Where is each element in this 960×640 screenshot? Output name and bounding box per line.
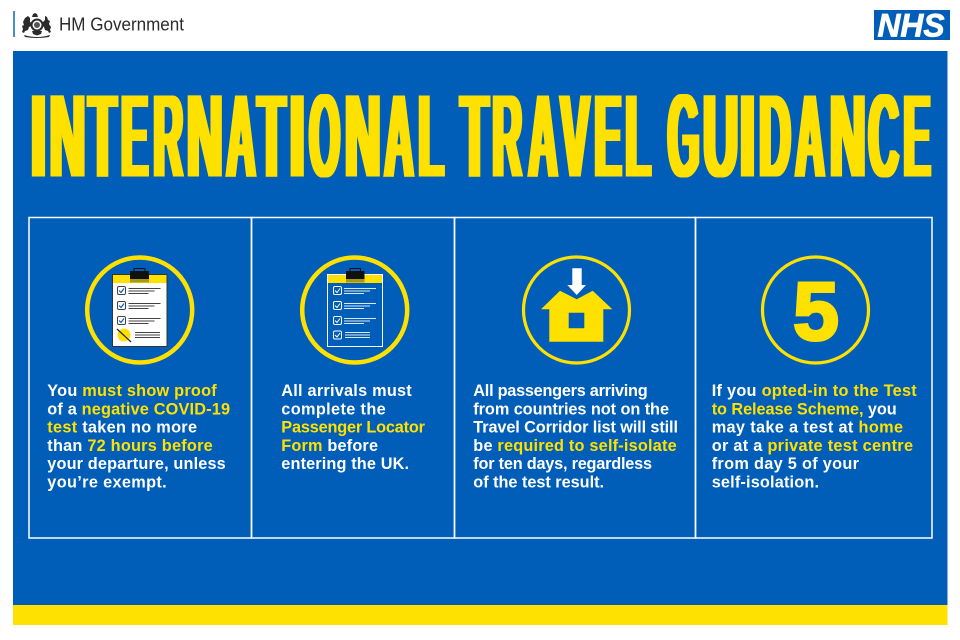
text: locator form: [281, 382, 426, 473]
icon: number five: 5: [793, 264, 839, 358]
title: N: [187, 69, 223, 204]
text: test to release scheme: [712, 382, 917, 492]
text: test to release scheme: from day 5 of your: [712, 455, 860, 473]
title: I: [30, 69, 46, 204]
icon: clipboard checklist: [302, 258, 407, 362]
title: L: [626, 69, 651, 204]
yellow footer band: [13, 605, 948, 625]
text: test to release scheme: self-isolation.: [712, 474, 819, 492]
title: U: [703, 69, 738, 204]
text: self-isolate: from countries not on the: [473, 400, 669, 418]
text: self-isolate: for ten days, regardless: [473, 455, 652, 473]
title: N: [50, 69, 85, 204]
logo wordmark: HM Government: [59, 14, 184, 34]
text: proof requirement: your departure, unless: [47, 455, 226, 473]
title: A: [528, 69, 558, 204]
text: proof requirement: [47, 382, 230, 492]
text: test to release scheme: to Release Scheme, you: [712, 400, 897, 418]
panel: proof of negative test: [29, 218, 252, 538]
text: self-isolate: of the test result.: [473, 474, 604, 492]
text: locator form: Passenger Locator: [281, 419, 426, 437]
title: E: [595, 69, 621, 204]
icon: clipboard checklist with struck-out item: [87, 258, 192, 362]
title: D: [759, 69, 791, 204]
panel: passenger locator form: [252, 218, 454, 538]
title: [30, 69, 930, 204]
icon: house with arrow: [524, 257, 630, 363]
title: V: [560, 69, 590, 204]
icon: royal crest: [22, 13, 51, 38]
panel: test to release: [696, 218, 932, 538]
text: self-isolate: be required to self-isolate: [473, 437, 677, 455]
text: locator form: All arrivals must: [281, 382, 412, 400]
text: test to release scheme: If you opted-in to the Test: [712, 382, 917, 400]
title: N: [830, 69, 866, 204]
title: O: [309, 69, 340, 204]
text: locator form: entering the UK.: [281, 455, 409, 473]
text: locator form: complete the: [281, 400, 386, 418]
title: R: [492, 69, 522, 204]
NHS logo: NHS: [878, 8, 945, 44]
text: self-isolate: [473, 382, 678, 492]
title: E: [121, 69, 148, 204]
icon: number five: [762, 257, 868, 363]
title: T: [258, 69, 286, 204]
HM Government logo: [13, 11, 184, 38]
text: proof requirement: of a negative COVID-19: [47, 400, 230, 418]
text: test to release scheme: may take a test at home: [712, 419, 903, 437]
text: self-isolate: Travel Corridor list will still: [473, 419, 678, 437]
text: test to release scheme: or at a private test centre: [712, 437, 913, 455]
title: L: [418, 69, 444, 204]
panel: self-isolation: [454, 218, 696, 538]
text: proof requirement: You must show proof: [47, 382, 217, 400]
title: I: [289, 69, 305, 204]
text: proof requirement: you’re exempt.: [47, 474, 167, 492]
title: A: [796, 69, 824, 204]
title: T: [460, 69, 488, 204]
title: R: [154, 69, 183, 204]
title: A: [226, 69, 256, 204]
text: proof requirement: than 72 hours before: [47, 437, 213, 455]
title: A: [384, 69, 414, 204]
title: T: [88, 69, 116, 204]
title: C: [868, 69, 899, 204]
title: G: [668, 69, 699, 204]
text: proof requirement: test taken no more: [47, 419, 197, 437]
text: self-isolate: All passengers arriving: [473, 382, 648, 400]
title: I: [740, 69, 755, 204]
text: locator form: Form before: [281, 437, 378, 455]
title: N: [345, 69, 381, 204]
